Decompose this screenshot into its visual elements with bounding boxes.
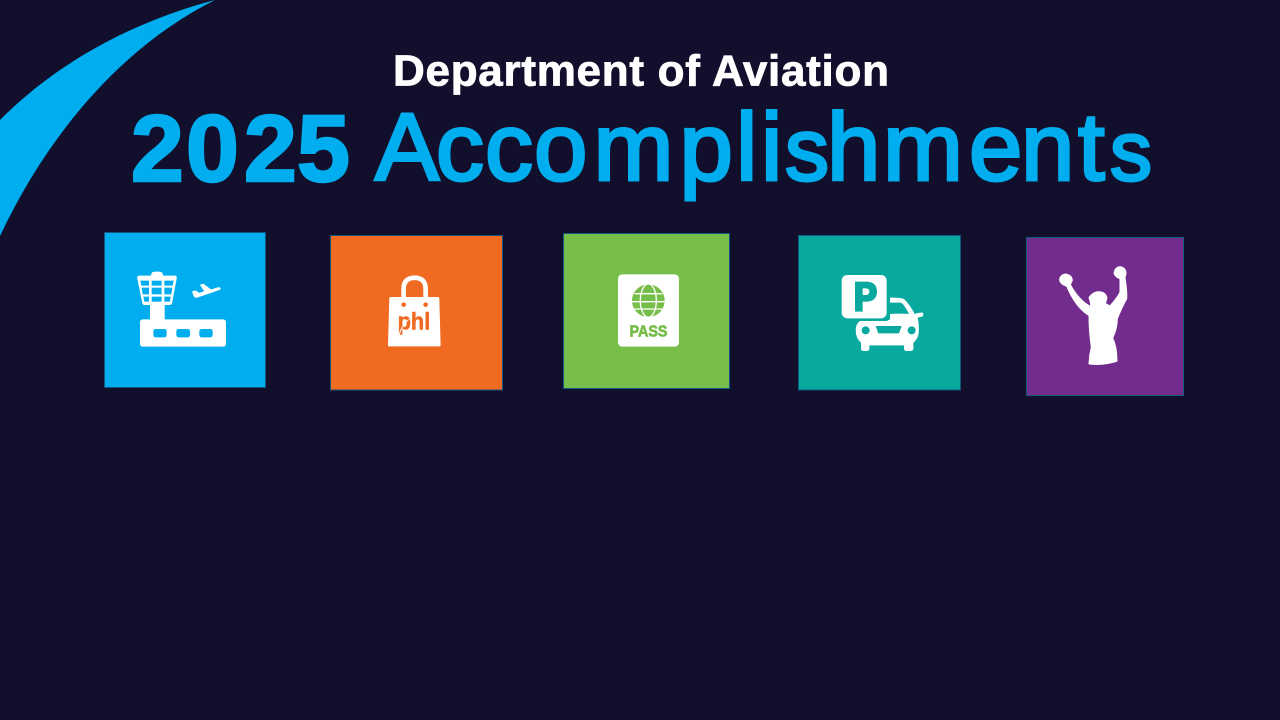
heading: 2025 Accomplishments: hment: [827, 94, 1105, 201]
icon: parking sign and car: [842, 275, 923, 351]
icon: PHL shopping bag: [388, 278, 441, 346]
tile: champion: [1026, 238, 1184, 396]
icon: victorious athlete silhouette: [1060, 267, 1126, 364]
title: Department of Aviation: Department of Aviation: [393, 46, 889, 96]
icon: passport: [618, 274, 679, 347]
heading: 2025 Accomplishments: Accompli: [375, 94, 782, 201]
icon: passport: PASS: [629, 323, 668, 340]
decorative swoosh: [0, 0, 215, 236]
tile: airport terminal: [104, 232, 266, 388]
tile: parking: [798, 236, 960, 390]
heading: 2025 Accomplishments: s: [785, 100, 829, 199]
heading: 2025 Accomplishments: s: [1110, 104, 1152, 198]
icon: PHL shopping bag: phl: [398, 309, 430, 336]
tile: passport: [564, 234, 730, 388]
heading: 2025 Accomplishments: 2025: [131, 96, 350, 202]
icon: control tower and plane: [137, 271, 226, 347]
tile: airport shopping: [330, 236, 502, 390]
heading: 2025 Accomplishments: [131, 94, 1152, 202]
